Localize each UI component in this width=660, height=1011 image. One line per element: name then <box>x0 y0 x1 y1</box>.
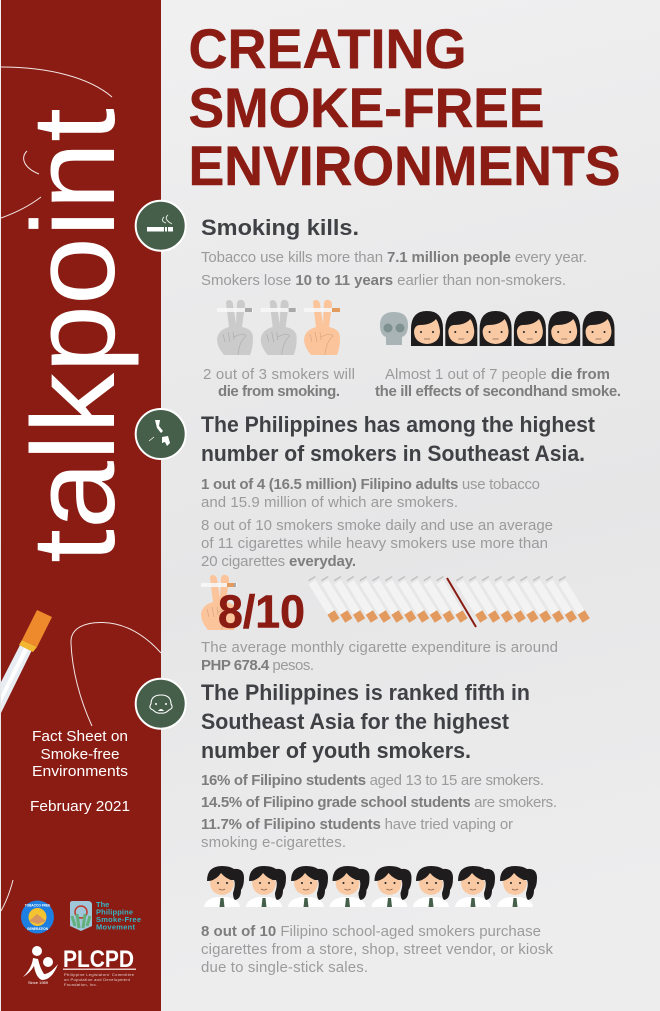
body text: Smokers lose 10 to 11 years earlier than non-smokers. <box>201 272 566 289</box>
body text: purchase <box>201 923 554 976</box>
body text: and 15.9 million of which are smokers. <box>201 494 458 511</box>
logo: Tobacco Free Generation: GENERATION <box>27 927 49 931</box>
logo: Tobacco Free Generation <box>21 900 54 934</box>
body text <box>201 249 587 289</box>
heading <box>201 412 595 466</box>
panel: left sidebar <box>1 0 161 1011</box>
icon row: smoker hands <box>217 300 340 355</box>
logo: PLCPD: PLCPD <box>63 946 134 973</box>
body text <box>201 476 553 570</box>
icon: lit cigarette <box>1 610 52 713</box>
title: CREATING <box>188 17 466 80</box>
caption: 1 out of 7: the ill effects of secondhand smoke. <box>375 383 621 400</box>
heading: The Philippines has among the highest <box>201 412 595 437</box>
body text: of 11 cigarettes while heavy smokers use more than <box>201 535 548 552</box>
logo: Tobacco Free Generation: TOBACCO FREE <box>25 904 50 908</box>
logo: The Philippine Smoke-Free Movement: The <box>96 900 109 909</box>
heading: Southeast Asia for the highest <box>201 709 509 734</box>
body text: purchase: 8 out of 10 Filipino school-aged smokers purchase <box>201 923 541 940</box>
logo: The Philippine Smoke-Free Movement: Smoke-Free <box>96 915 141 924</box>
body text: 8 out of 10 smokers smoke daily and use an average <box>201 517 553 534</box>
logo: PLCPD: on Population and Development <box>64 977 131 982</box>
body text: purchase: cigarettes from a store, shop, street vendor, or kiosk <box>201 941 554 958</box>
heading: Smoking kills. <box>201 215 359 240</box>
sidebar text: fact sheet: Fact Sheet on <box>32 728 128 745</box>
icon: hand with cigarette <box>201 575 237 630</box>
body text: smoking e-cigarettes. <box>201 834 346 851</box>
caption: 1 out of 7 <box>375 366 621 400</box>
sidebar text: fact sheet: Environments <box>32 763 128 780</box>
heading: number of youth smokers. <box>201 738 471 763</box>
body text: 1 out of 4 (16.5 million) Filipino adults use tobacco <box>201 476 540 493</box>
caption: 1 out of 7: Almost 1 out of 7 people die from <box>385 366 610 383</box>
body text: Tobacco use kills more than 7.1 million people every year. <box>201 249 587 266</box>
logo: The Philippine Smoke-Free Movement <box>70 900 141 932</box>
body text: 20 cigarettes everyday. <box>201 553 356 570</box>
icon row: six faces <box>411 311 614 346</box>
logo: PLCPD: Philippine Legislators' Committee <box>64 972 135 977</box>
title: ENVIRONMENTS <box>188 134 620 197</box>
title <box>188 17 620 197</box>
sidebar title: talkpoint: talkpoint <box>8 108 140 563</box>
caption: 2 out of 3 <box>203 366 355 400</box>
sidebar text: fact sheet: February 2021 <box>30 798 130 815</box>
sidebar text: fact sheet: Smoke-free <box>40 746 120 763</box>
body text: expenditure <box>201 639 558 674</box>
body text: 11.7% of Filipino students have tried vaping or <box>201 816 513 833</box>
caption: 2 out of 3: 2 out of 3 smokers will <box>203 366 355 383</box>
heading: number of smokers in Southeast Asia. <box>201 441 585 466</box>
heading <box>201 680 530 763</box>
body text: expenditure: PHP 678.4 pesos. <box>201 657 314 674</box>
icon: smoking badge <box>136 201 186 251</box>
logo: PLCPD: Since 1989 <box>28 980 49 985</box>
sidebar text: fact sheet <box>30 728 130 815</box>
body text <box>201 772 557 851</box>
title: SMOKE-FREE <box>188 76 544 139</box>
section: smoking kills <box>201 215 621 400</box>
logo: The Philippine Smoke-Free Movement: Philippine <box>96 908 133 916</box>
icon: skull <box>380 312 408 345</box>
logo: The Philippine Smoke-Free Movement: Movement <box>96 922 136 932</box>
body text: 14.5% of Filipino grade school students are smokers. <box>201 794 557 811</box>
logo: PLCPD <box>23 946 136 987</box>
heading: The Philippines is ranked fifth in <box>201 680 530 705</box>
section: smokers in the Philippines <box>201 412 595 674</box>
chart: twenty cigarettes <box>309 576 586 627</box>
body text: purchase: due to single-stick sales. <box>201 959 368 976</box>
icon row: eight students <box>204 866 537 907</box>
statistic: 8/10: 8/10 <box>218 586 305 638</box>
icon: Philippines badge <box>136 409 186 459</box>
body text: 16% of Filipino students aged 13 to 15 are smokers. <box>201 772 544 789</box>
logo: PLCPD: Foundation, Inc. <box>64 982 97 987</box>
icon: baby badge <box>136 679 186 729</box>
caption: 2 out of 3: die from smoking. <box>218 383 340 400</box>
body text: expenditure: The average monthly cigarette expenditure is around <box>201 639 558 656</box>
section: youth smokers <box>201 680 557 976</box>
